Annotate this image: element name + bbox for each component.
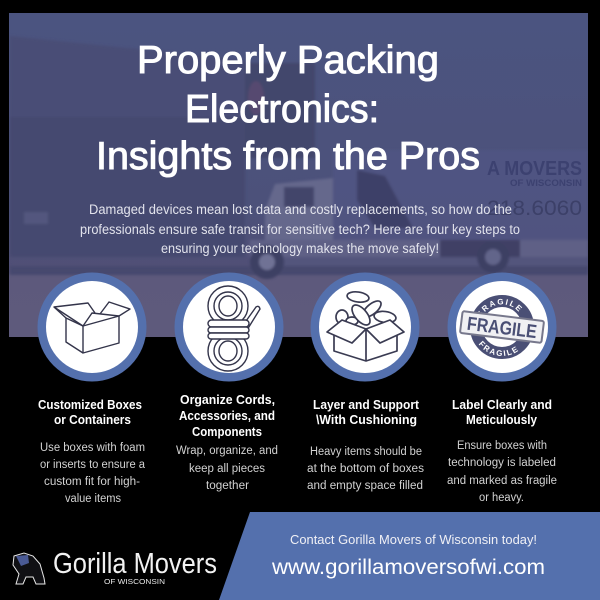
- step 2 text: Components: [192, 425, 262, 439]
- step 2 text: Wrap, organize, and: [176, 445, 278, 457]
- step 4 text: Label Clearly and: [452, 398, 552, 412]
- panel: photo header with moving truck: A MOVERS: [487, 158, 582, 180]
- step 1 text: custom fit for high-: [44, 476, 140, 488]
- logo: Gorilla Movers of Wisconsin: OF WISCONSIN: [104, 577, 165, 586]
- panel: photo header with moving truck: [9, 13, 588, 337]
- logo: Gorilla Movers of Wisconsin: Gorilla Movers: [53, 548, 217, 580]
- step 1 text: Customized Boxes: [38, 398, 142, 412]
- step 3 text: at the bottom of boxes: [307, 463, 424, 475]
- panel: contact banner: [219, 512, 600, 600]
- intro text: Damaged devices mean lost data and costly replacements, so how do the: [89, 202, 512, 217]
- icon: gorilla: [13, 553, 45, 584]
- website url: www.gorillamoversofwi.com: [271, 556, 545, 579]
- icon: fragile stamp: FRAGILE: [466, 314, 538, 343]
- icon: box with packing peanuts: [310, 272, 420, 382]
- step 3 text: \With Cushioning: [316, 413, 417, 427]
- step 1 text: or inserts to ensure a: [40, 459, 146, 471]
- title: Insights from the Pros: [96, 135, 480, 178]
- step 1 text: Use boxes with foam: [40, 442, 145, 454]
- title: [96, 39, 480, 178]
- panel: photo header with moving truck: 218.6060: [487, 197, 582, 220]
- panel: photo header with moving truck: OF WISCONSIN: [510, 178, 582, 188]
- step 1 text: value items: [65, 493, 121, 505]
- step 4 text: [447, 398, 557, 504]
- step 3 text: Heavy items should be: [310, 446, 422, 458]
- title: Properly Packing: [137, 39, 439, 82]
- intro text: [80, 202, 520, 256]
- step 4 text: and marked as fragile: [447, 475, 557, 487]
- step 4 text: Ensure boxes with: [457, 440, 547, 452]
- logo: Gorilla Movers of Wisconsin: [13, 548, 217, 586]
- intro text: professionals ensure safe transit for sensitive tech? Here are four key steps to: [80, 222, 520, 237]
- icon: fragile stamp: FRAGILE: [478, 340, 518, 356]
- step 3 text: [307, 398, 424, 492]
- step 2 text: together: [206, 480, 249, 492]
- step 2 text: keep all pieces: [189, 463, 265, 475]
- step 2 text: Organize Cords,: [180, 393, 275, 407]
- step 2 text: Accessories, and: [179, 409, 275, 423]
- icon: fragile stamp: [448, 272, 556, 382]
- step 1 text: [38, 398, 146, 505]
- step 4 text: Meticulously: [466, 413, 537, 427]
- step 3 text: Layer and Support: [313, 398, 420, 412]
- icon: coiled cord: [174, 272, 284, 382]
- step 1 text: or Containers: [54, 413, 131, 427]
- icon: fragile stamp: FRAGILE: [478, 298, 522, 312]
- step 4 text: or heavy.: [479, 492, 524, 504]
- title: Electronics:: [185, 88, 379, 131]
- contact line: Contact Gorilla Movers of Wisconsin today!: [290, 532, 537, 547]
- step 3 text: and empty space filled: [307, 480, 423, 492]
- step 2 text: [176, 393, 278, 492]
- step 4 text: technology is labeled: [448, 457, 556, 469]
- icon: open box: [38, 272, 146, 382]
- intro text: ensuring your technology makes the move safely!: [161, 241, 439, 256]
